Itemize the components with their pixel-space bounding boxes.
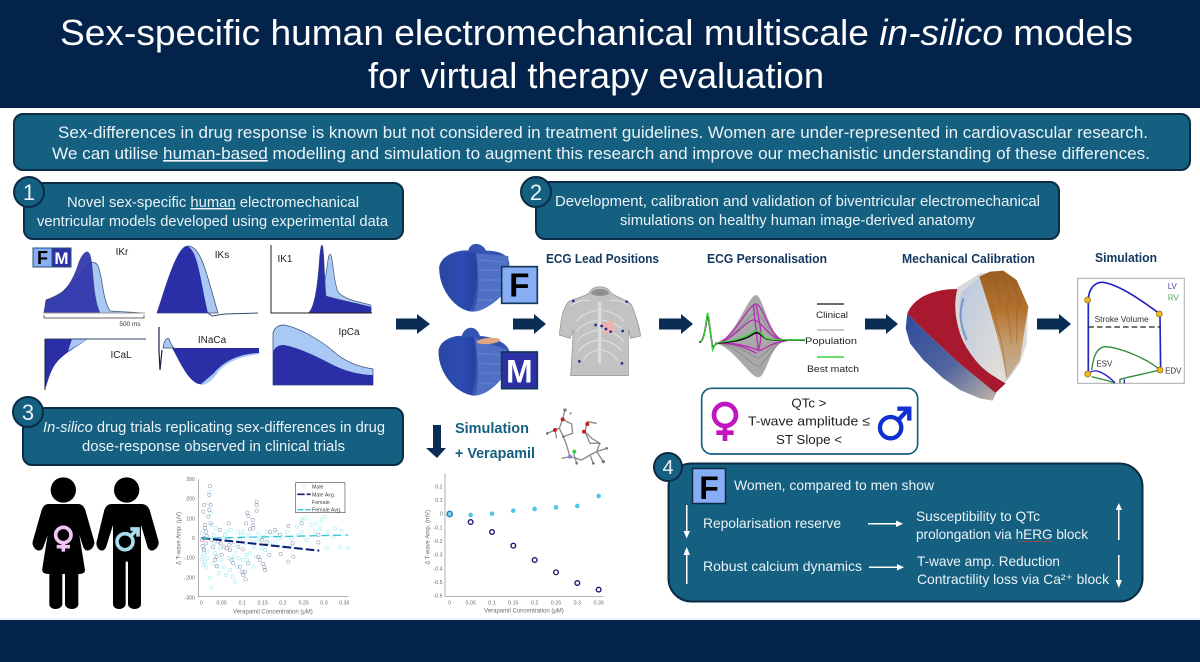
chart: IpCa <box>273 325 373 385</box>
header band with title <box>0 0 1200 108</box>
panel 2 heading: 2 <box>530 180 542 205</box>
header band with title: for virtual therapy evaluation <box>368 55 824 96</box>
female heart anatomy with F tag: F <box>509 268 530 305</box>
scatter chart: clinical T-wave change vs verapamil: 0.2 <box>279 601 287 607</box>
chart: IKs: IKs <box>215 250 229 261</box>
icon: verapamil molecule <box>546 408 608 465</box>
arrow: models to anatomy <box>396 314 430 334</box>
dot chart: simulated T-wave change vs verapamil: 0.1 <box>435 498 443 504</box>
dot chart: simulated T-wave change vs verapamil <box>425 473 604 615</box>
icon: female symbol <box>714 404 736 441</box>
panel 2 heading <box>521 177 1059 239</box>
intro banner: We can utilise human-based modelling and simulation to augment this research and improve our mechanistic understanding of these differences. <box>52 145 1150 163</box>
scatter legend: Male <box>312 485 324 491</box>
torso with ECG lead positions <box>559 287 641 376</box>
panel 4: key findings: Contractility loss via Ca²⁺ block <box>917 571 1110 587</box>
sex comparison box: ST Slope < <box>776 432 842 447</box>
panel 1 heading: Novel sex-specific human electromechanical <box>67 194 359 211</box>
mechanical calibration heart <box>906 271 1028 401</box>
dot chart: simulated T-wave change vs verapamil: 0.2 <box>531 600 538 606</box>
heading: Simulation: Simulation <box>1095 251 1157 265</box>
scatter chart: clinical T-wave change vs verapamil: 200 <box>186 497 195 503</box>
dot chart: simulated T-wave change vs verapamil: 0 <box>440 512 443 518</box>
label: Simulation + Verapamil: Simulation <box>455 420 529 437</box>
scatter chart: clinical T-wave change vs verapamil: 0.05 <box>216 601 227 607</box>
dot chart: simulated T-wave change vs verapamil: 0.05 <box>465 600 476 606</box>
panel 1 heading: ventricular models developed using experimental data <box>37 213 389 230</box>
male heart anatomy with M tag <box>439 328 537 396</box>
pressure-volume loop simulation: RV <box>1168 293 1179 302</box>
scatter chart: clinical T-wave change vs verapamil: -100 <box>184 556 195 562</box>
pressure-volume loop simulation: Stroke Volume <box>1095 315 1149 324</box>
ECG legend: Population <box>805 336 857 347</box>
arrows in findings <box>684 503 1122 588</box>
chart: IKr <box>44 247 145 328</box>
dot chart: simulated T-wave change vs verapamil: -0.1 <box>433 525 443 531</box>
scatter chart: clinical T-wave change vs verapamil <box>176 477 350 616</box>
heading: ECG Personalisation: ECG Personalisation <box>707 252 827 266</box>
ECG legend: Best match <box>807 364 859 375</box>
F tag <box>692 468 726 506</box>
dot chart: simulated T-wave change vs verapamil: 0.35 <box>593 600 604 606</box>
intro banner <box>14 114 1190 170</box>
scatter chart: clinical T-wave change vs verapamil: 0 <box>200 601 203 607</box>
dot chart: simulated T-wave change vs verapamil: -0.2 <box>433 539 443 545</box>
panel 3 heading: 3 <box>22 400 34 425</box>
dot chart: simulated T-wave change vs verapamil: 0 <box>448 600 451 606</box>
panel 2 heading: simulations on healthy human image-derived anatomy <box>620 212 975 229</box>
arrow: calibration to simulation <box>1037 314 1071 334</box>
dot chart: simulated T-wave change vs verapamil: 0.3 <box>574 600 581 606</box>
scatter chart: clinical T-wave change vs verapamil: -200 <box>184 575 195 581</box>
pressure-volume loop simulation: ESV <box>1096 360 1113 369</box>
arrow: anatomy to lead positions <box>513 314 546 334</box>
F/M legend badge: F <box>37 248 48 268</box>
F/M legend badge <box>33 248 71 268</box>
panel 4: key findings: Susceptibility to QTc <box>916 508 1040 524</box>
chart: IK1: IK1 <box>277 254 293 265</box>
dot chart: simulated T-wave change vs verapamil: 0.1 <box>488 600 496 606</box>
scatter chart: clinical T-wave change vs verapamil: -300 <box>184 595 195 601</box>
label: Simulation + Verapamil: + Verapamil <box>455 445 535 462</box>
scatter chart: clinical T-wave change vs verapamil: 0.25 <box>298 601 309 607</box>
icon: female figure <box>33 477 94 609</box>
ECG legend <box>805 304 859 375</box>
header band with title: Sex-specific human electromechanical multiscale in-silico models <box>60 12 1133 53</box>
panel 3 heading: dose-response observed in clinical trials <box>82 438 345 455</box>
panel 2 heading: Development, calibration and validation of biventricular electromechanical <box>555 193 1040 210</box>
pressure-volume loop simulation: LV <box>1168 282 1178 291</box>
footer band <box>0 618 1200 662</box>
pressure-volume loop simulation <box>1078 278 1184 383</box>
dot chart: simulated T-wave change vs verapamil: 0.25 <box>551 600 561 606</box>
chart: IKs <box>157 246 258 316</box>
chart: INaCa <box>159 327 259 385</box>
scatter chart: clinical T-wave change vs verapamil: 0.15 <box>257 601 268 607</box>
scatter legend: Female <box>312 500 330 506</box>
scatter chart: clinical T-wave change vs verapamil: Verapamil Concentration (μM) <box>233 610 313 616</box>
dot chart: simulated T-wave change vs verapamil: -0.4 <box>433 566 443 572</box>
scatter legend <box>296 483 345 514</box>
scatter legend: Female Avg. <box>312 508 342 514</box>
panel 4: key findings: prolongation via hERG block <box>916 526 1089 542</box>
male heart anatomy with M tag: M <box>506 354 533 390</box>
arrow: personalisation to calibration <box>865 314 898 334</box>
scatter chart: clinical T-wave change vs verapamil: 0.1 <box>239 601 246 607</box>
dot chart: simulated T-wave change vs verapamil: 0.2 <box>435 484 443 490</box>
chart: IKr: 500 ms <box>119 321 141 328</box>
chart: IK1 <box>271 245 372 313</box>
label: Simulation + Verapamil <box>455 420 535 462</box>
sex comparison box: QTc > <box>791 395 827 410</box>
dot chart: simulated T-wave change vs verapamil: -0.3 <box>433 553 443 559</box>
F tag: F <box>699 470 719 506</box>
arrow: simulation down <box>426 425 446 458</box>
chart: IpCa: IpCa <box>338 327 360 338</box>
scatter chart: clinical T-wave change vs verapamil: 0 <box>192 536 195 542</box>
panel 4: key findings: 4 <box>662 457 674 479</box>
icon: male figure <box>96 477 159 609</box>
pressure-volume loop simulation: EDV <box>1165 367 1182 376</box>
panel 4: key findings <box>654 453 1142 602</box>
F/M legend badge: M <box>54 249 69 268</box>
scatter chart: clinical T-wave change vs verapamil: 100 <box>186 516 195 522</box>
panel 4: key findings: Repolarisation reserve <box>703 515 841 531</box>
chart: ICaL <box>45 339 146 390</box>
dot chart: simulated T-wave change vs verapamil: Δ T-wave Amp. (mV) <box>425 510 431 565</box>
sex comparison box: T-wave amplitude ≤ <box>748 414 870 429</box>
chart: INaCa: INaCa <box>198 335 227 346</box>
arrow: leads to personalisation <box>659 314 693 334</box>
scatter chart: clinical T-wave change vs verapamil: 0.3 <box>320 601 328 607</box>
dot chart: simulated T-wave change vs verapamil: -0.5 <box>433 580 443 586</box>
intro banner: Sex-differences in drug response is known but not considered in treatment guidelines. Women are under-represented in cardiovascular research. <box>58 124 1148 142</box>
dot chart: simulated T-wave change vs verapamil: -0.6 <box>433 594 443 600</box>
scatter chart: clinical T-wave change vs verapamil: Δ T-wave Amp. (μV) <box>176 512 182 565</box>
heading: Mechanical Calibration: Mechanical Calibration <box>902 252 1035 266</box>
dot chart: simulated T-wave change vs verapamil: Verapamil Concentration (μM) <box>484 609 564 615</box>
heading: ECG Lead Positions: ECG Lead Positions <box>546 252 659 266</box>
female heart anatomy with F tag <box>439 244 537 312</box>
panel 4: key findings: Robust calcium dynamics <box>703 558 862 574</box>
scatter legend: Male Avg. <box>312 492 335 498</box>
chart: ICaL: ICaL <box>110 350 132 361</box>
scatter chart: clinical T-wave change vs verapamil: 300 <box>186 477 195 483</box>
sex comparison box <box>702 388 918 454</box>
icon: female and male figures <box>33 477 159 609</box>
ECG population traces <box>699 295 805 377</box>
panel 4: key findings: Women, compared to men show <box>734 477 935 493</box>
panel 4: key findings: T-wave amp. Reduction <box>917 553 1060 569</box>
panel 3 heading: In-silico drug trials replicating sex-differences in drug <box>43 419 385 436</box>
dot chart: simulated T-wave change vs verapamil: 0.15 <box>508 600 519 606</box>
scatter chart: clinical T-wave change vs verapamil: 0.35 <box>339 601 350 607</box>
panel 1 heading: 1 <box>23 180 35 205</box>
panel 1 heading <box>14 177 403 239</box>
chart: IKr: IKr <box>116 247 129 258</box>
icon: male symbol <box>880 409 909 438</box>
ECG legend: Clinical <box>816 310 848 321</box>
panel 3 heading <box>13 397 403 465</box>
